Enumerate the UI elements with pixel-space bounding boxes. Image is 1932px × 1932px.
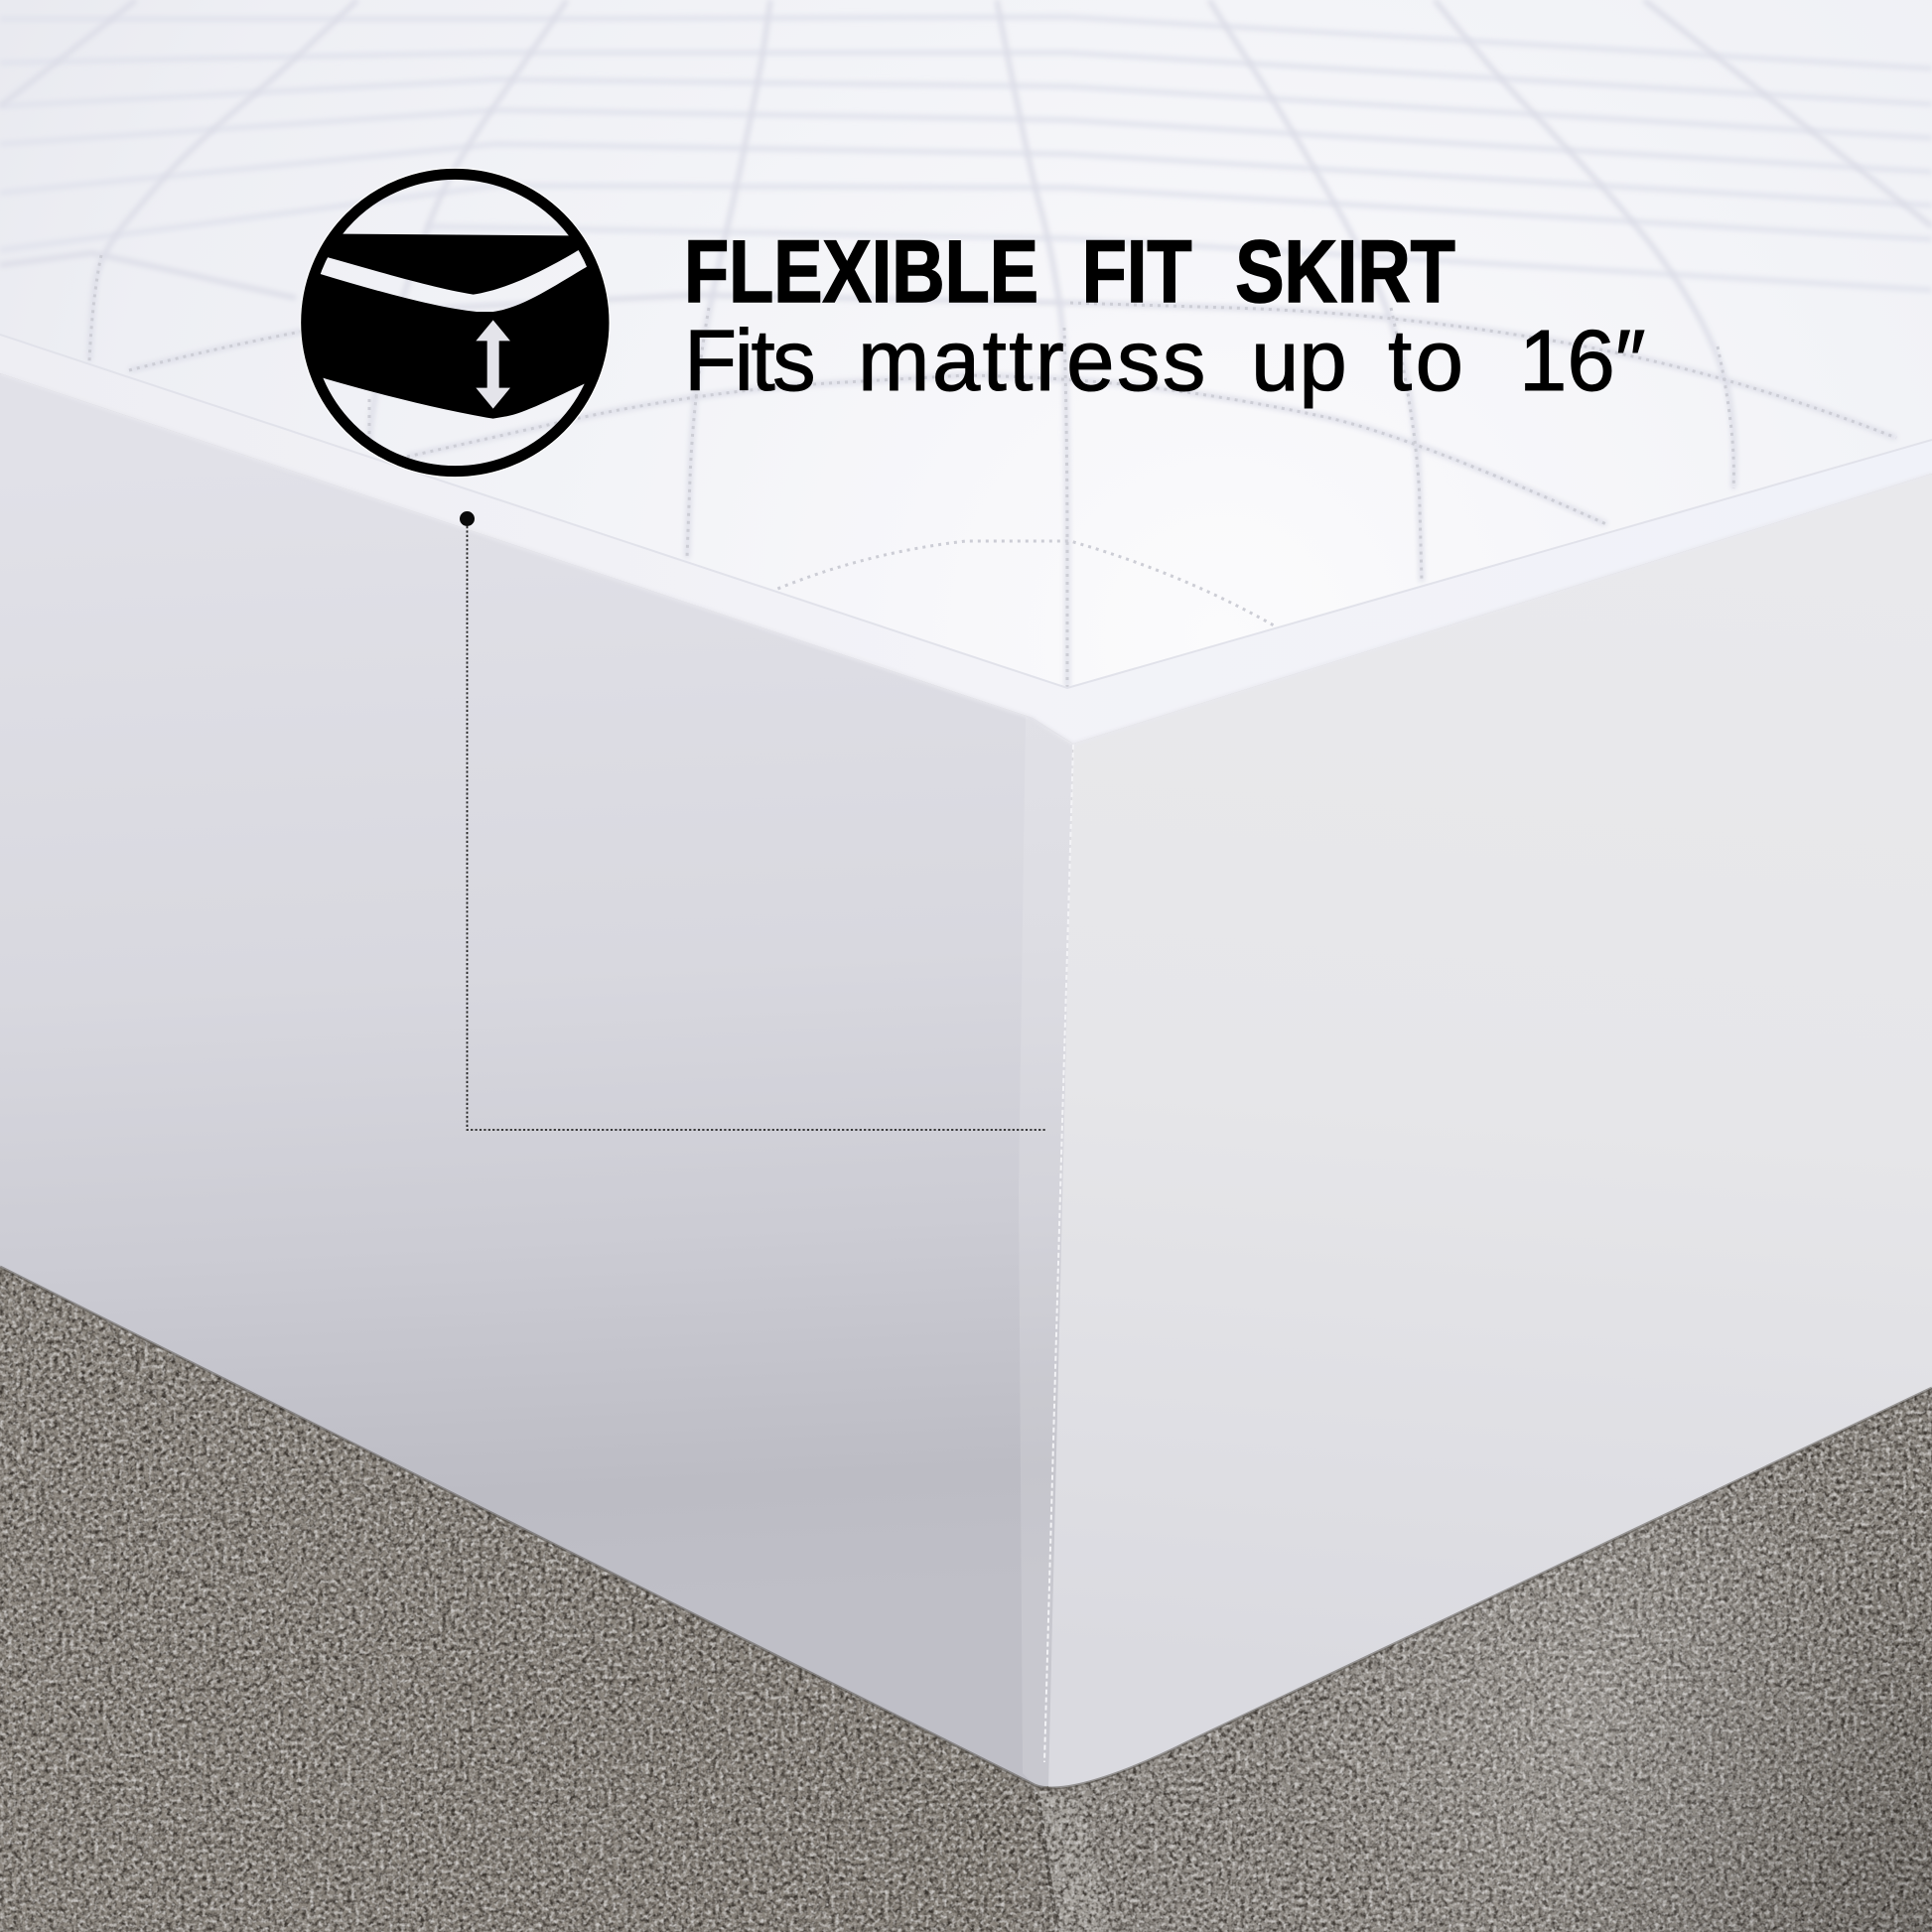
heading: FLEXIBLE FIT SKIRT xyxy=(684,223,1455,322)
subheading: mattress xyxy=(858,313,1208,409)
icon: black mattress layers xyxy=(298,234,609,419)
icon: mattress skirt in circle xyxy=(298,168,610,478)
panel: right skirt side xyxy=(1048,474,1932,1788)
subheading: to xyxy=(1388,313,1467,409)
panel: elastic edge band xyxy=(0,335,1932,744)
soft blend where band meets skirt xyxy=(0,373,1932,744)
stitched dotted seams xyxy=(89,255,1896,688)
panel: quilted mattress top xyxy=(0,0,1932,688)
heading and subheading xyxy=(684,223,1646,409)
corner seam strip xyxy=(1019,717,1073,1787)
icon: circle ring xyxy=(307,174,604,472)
subheading: up xyxy=(1251,313,1347,409)
subheading: 16″ xyxy=(1519,313,1646,409)
callout leader line with dot xyxy=(460,511,1046,1130)
panel: left skirt side xyxy=(0,373,1073,1787)
diamond quilting shadow lines xyxy=(0,0,1932,688)
quilted channel rows xyxy=(0,17,1932,290)
base corner welt seam xyxy=(1037,1792,1112,1932)
skirt hem shadow against base xyxy=(0,1267,1932,1788)
subheading: Fits xyxy=(684,313,813,409)
icon: double-headed height arrow xyxy=(476,320,510,409)
